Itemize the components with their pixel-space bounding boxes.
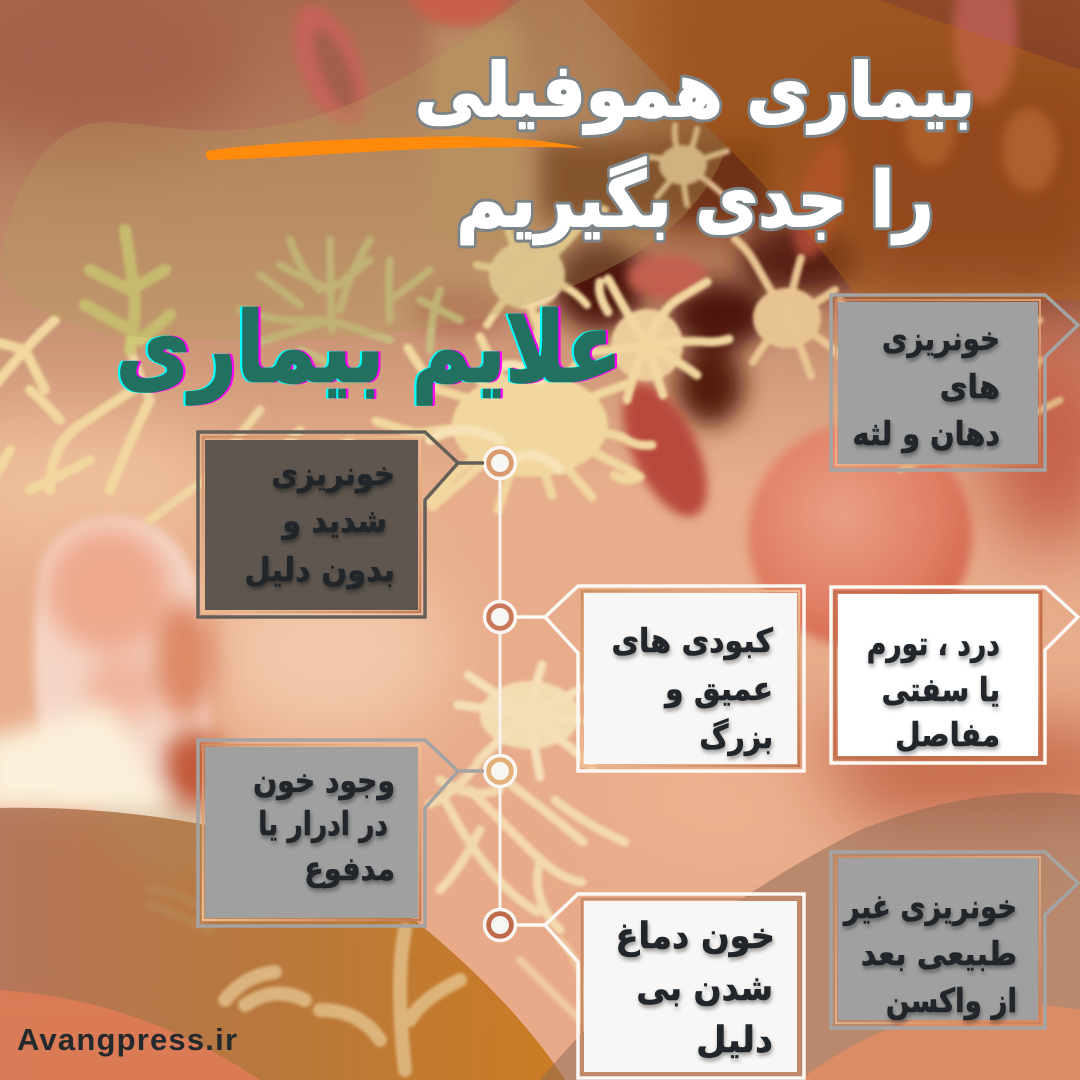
text: gum bleeding: خونریزی (882, 321, 1000, 359)
card: vaccine bleeding (831, 852, 1078, 1028)
timeline node 1 (484, 448, 516, 478)
timeline node 4 (484, 910, 516, 940)
translucent brown blob bottom right (540, 793, 1080, 1080)
timeline line (498, 470, 502, 910)
text: joint pain (867, 625, 1000, 754)
left large cell outline (34, 517, 215, 800)
salmon corner bottom right (800, 1004, 1080, 1080)
text: vaccine bleeding (842, 889, 1017, 1021)
translucent amber blob bottom left (0, 808, 565, 1080)
text: vaccine bleeding: طبیعی بعد (861, 936, 1017, 973)
website label: Avangpress.ir (17, 1022, 238, 1057)
card: blood in urine (198, 740, 484, 926)
text: blood in urine: در ادرار یا (258, 805, 388, 844)
text: brain bleeding: شدن بی (636, 968, 773, 1009)
title (415, 48, 975, 245)
subtitle: symptoms: علایم بیماری (114, 292, 620, 405)
text: vaccine bleeding: از واکسن (886, 983, 1017, 1021)
text: joint pain: مفاصل (895, 716, 1000, 754)
subtitle: symptoms: علایم بیماری (118, 292, 624, 405)
text: blood in urine (253, 763, 395, 889)
lower central cluster (458, 665, 612, 777)
text: severe bleeding: خونریزی (271, 455, 395, 493)
bottom left pale fingers (225, 930, 460, 1070)
translucent orange blob upper right (583, 0, 1080, 300)
text: brain bleeding (616, 916, 775, 1061)
timeline node 3 (484, 756, 516, 786)
upper cluster (489, 241, 565, 309)
left fringe (0, 320, 150, 490)
orange brush underline (206, 137, 583, 160)
text: gum bleeding (852, 321, 1000, 454)
dark pockets behind platelets (410, 20, 860, 425)
text: deep bruises: بزرگ (699, 717, 773, 757)
text: joint pain: یا سفتی (882, 672, 1000, 710)
text: severe bleeding (244, 455, 395, 589)
text: brain bleeding: خون دماغ (616, 916, 775, 957)
bottom fingers (150, 890, 210, 930)
text: deep bruises (612, 623, 774, 757)
card: deep bruises (516, 586, 804, 771)
card: joint pain (831, 587, 1078, 763)
text: brain bleeding: دلیل (696, 1020, 773, 1061)
title line 2: را جدی بگیریم (456, 157, 934, 245)
text: gum bleeding: دهان و لثه (852, 415, 1000, 454)
subtitle: symptoms: علایم بیماری (116, 292, 622, 405)
text: severe bleeding: بدون دلیل (244, 552, 395, 589)
text: blood in urine: وجود خون (253, 763, 395, 801)
card: severe bleeding (198, 432, 484, 617)
red cells (34, 0, 1058, 800)
text: gum bleeding: های (940, 369, 1000, 406)
text: blood in urine: مدفوع (304, 850, 395, 889)
text: deep bruises: عمیق و (663, 671, 773, 708)
card: brain bleeding (516, 894, 804, 1078)
timeline node 2 (484, 602, 516, 632)
text: severe bleeding: شدید و (281, 503, 387, 540)
translucent olive blob upper left (0, 0, 727, 340)
text: vaccine bleeding: خونریزی غیر (842, 889, 1017, 927)
olive branches (85, 230, 170, 350)
title line 2: را جدی بگیریم (456, 157, 934, 245)
translucent salmon corner bottom left (0, 990, 260, 1080)
title line 1: بیماری هموفیلی (415, 48, 975, 135)
left large cell interior (0, 528, 230, 1000)
text: deep bruises: کبودی های (612, 623, 774, 660)
card: gum bleeding (831, 295, 1078, 470)
title line 1: بیماری هموفیلی (415, 48, 975, 135)
text: joint pain: درد ، تورم (867, 625, 1000, 664)
